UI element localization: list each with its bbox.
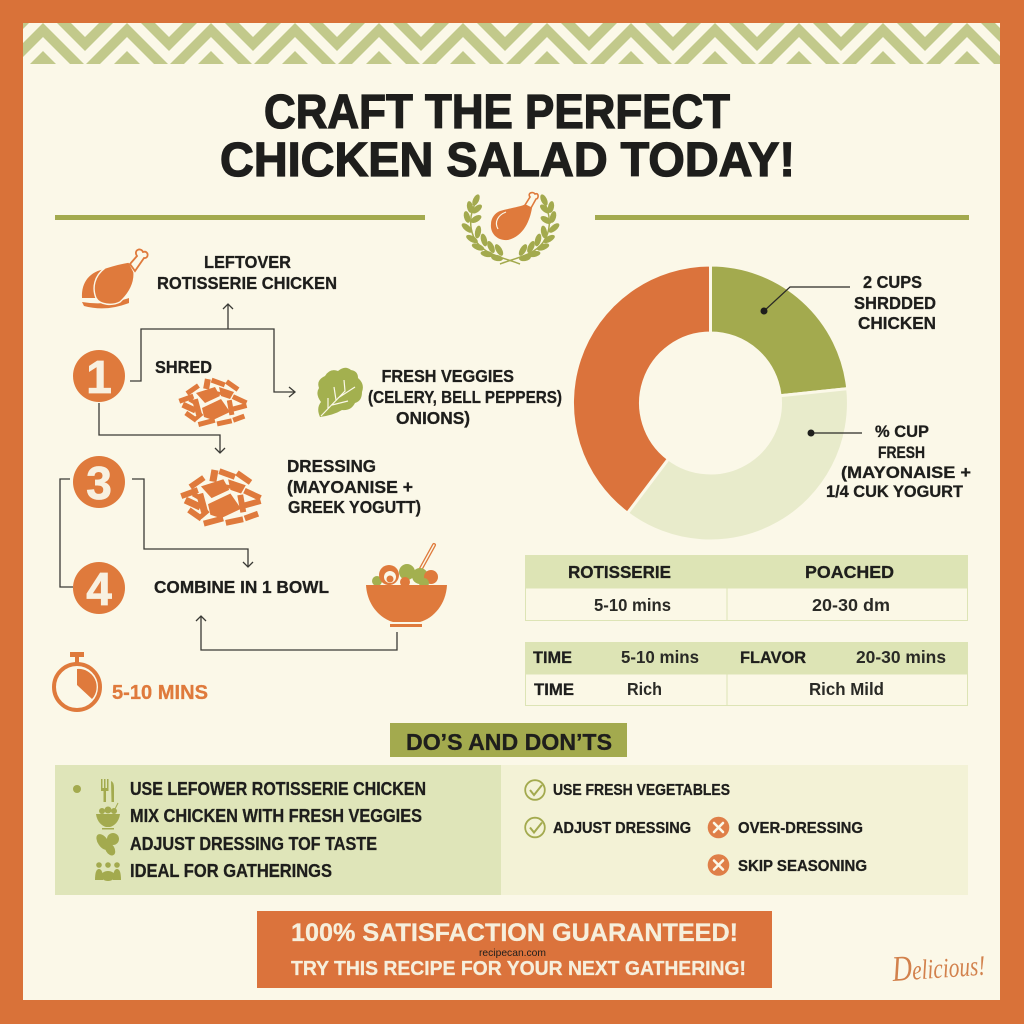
right title rule (595, 215, 969, 220)
step 3 badge (73, 456, 125, 509)
text: fresh veggies (368, 366, 562, 428)
step 1 badge: 1 (86, 351, 112, 403)
tip list: MIX CHICKEN WITH FRESH VEGGIES (130, 806, 422, 826)
text: shred: SHRED (155, 357, 212, 377)
tip list: IDEAL FOR GATHERINGS (130, 861, 332, 881)
table: time and flavor: 20-30 mins (856, 647, 946, 667)
icon: herbs (94, 832, 119, 857)
icon: stopwatch (54, 652, 100, 710)
icon: lettuce leaf (317, 368, 363, 417)
tip list: USE LEFOWER ROTISSERIE CHICKEN (130, 779, 426, 799)
icon: roast chicken (82, 249, 148, 308)
table: time and flavor: TIME (534, 680, 574, 699)
text: fresh veggies: (CELERY, BELL PEPPERS) (368, 387, 562, 407)
callout: cup fresh dressing: % CUP (875, 422, 929, 441)
table: time and flavor: 5-10 mins (621, 647, 699, 667)
title: CHICKEN SALAD TODAY! (220, 134, 795, 187)
text: 5-10 mins: 5-10 MINS (112, 681, 208, 704)
icon: check (525, 818, 545, 837)
icon: salad bowl small (96, 803, 120, 830)
callout: 2 cups shredded chicken: 2 CUPS (863, 272, 922, 292)
segment: shredded chicken (710, 265, 848, 396)
icon: cross (708, 817, 729, 838)
segment: orange (572, 265, 710, 513)
table: time and flavor: FLAVOR (740, 648, 806, 667)
text: dressing: (MAYOANISE + (287, 477, 413, 497)
chevron top band (23, 23, 1000, 64)
text: combine in 1 bowl: COMBINE IN 1 BOWL (154, 577, 329, 597)
connector arrows from step 3 and 4 (60, 479, 397, 650)
signature: delicious: Delicious! (890, 943, 986, 989)
table: time and flavor (525, 642, 968, 706)
icon: chicken leg in laurel wreath (460, 193, 561, 264)
step 3 badge: 3 (86, 457, 112, 509)
title: CRAFT THE PERFECT (264, 86, 730, 139)
table: rotisserie vs poached: ROTISSERIE (568, 562, 671, 582)
connector arrows from step 1 (99, 304, 295, 453)
text: use fresh vegetables: USE FRESH VEGETABLES (553, 782, 730, 799)
guarantee banner (257, 911, 772, 988)
callout: 2 cups shredded chicken: CHICKEN (858, 313, 936, 333)
text: dressing: GREEK YOGUTT) (288, 497, 421, 517)
table: rotisserie vs poached: 5-10 mins (594, 595, 671, 615)
table: time and flavor: TIME (533, 648, 572, 667)
icon: shredded chicken (178, 378, 248, 427)
title (220, 86, 795, 187)
table: rotisserie vs poached: 20-30 dm (812, 595, 890, 615)
icon: people (95, 862, 121, 881)
tip list (130, 779, 426, 881)
step 4 badge: 4 (86, 563, 112, 615)
panel: do and don't checklist (501, 765, 968, 895)
step 1 badge (73, 350, 125, 403)
text: dressing: DRESSING (287, 456, 376, 476)
icon: salad bowl (366, 545, 447, 627)
guarantee banner: 100% SATISFACTION GUARANTEED! (291, 919, 738, 947)
text: over-dressing: OVER-DRESSING (738, 820, 863, 837)
segment: dressing (627, 389, 848, 541)
table: rotisserie vs poached (525, 555, 968, 620)
table: rotisserie vs poached: POACHED (805, 562, 894, 582)
left title rule (55, 215, 425, 220)
text: leftover rotisserie chicken: LEFTOVER (204, 252, 291, 272)
table: time and flavor: Rich (627, 679, 662, 699)
icon: cross (708, 854, 729, 876)
callout: cup fresh dressing: (MAYONAISE + (841, 463, 971, 482)
donut chart (572, 265, 848, 541)
text: fresh veggies: FRESH VEGGIES (382, 366, 514, 386)
icon: shredded chicken dressing (180, 468, 262, 526)
callout: cup fresh dressing (808, 422, 971, 501)
icon: fork and knife (101, 779, 114, 802)
step 4 badge (73, 562, 125, 615)
heading: do's and don'ts: DO’S AND DON’TS (406, 729, 612, 755)
text: adjust dressing: ADJUST DRESSING (553, 820, 691, 837)
callout: cup fresh dressing: FRESH (878, 443, 925, 462)
panel: tips (55, 765, 501, 895)
text: leftover rotisserie chicken (157, 252, 337, 293)
text: fresh veggies: ONIONS) (396, 408, 470, 428)
tip list: ADJUST DRESSING TOF TASTE (130, 834, 377, 854)
table: time and flavor: Rich Mild (809, 679, 884, 699)
heading: do's and don'ts (390, 723, 627, 757)
text: dressing (287, 456, 421, 517)
callout: cup fresh dressing: 1/4 CUK YOGURT (826, 482, 964, 501)
text: skip seasoning: SKIP SEASONING (738, 858, 867, 875)
icon: check (525, 780, 545, 800)
guarantee banner: TRY THIS RECIPE FOR YOUR NEXT GATHERING! (291, 957, 746, 980)
bullet dot (73, 785, 81, 793)
text: leftover rotisserie chicken: ROTISSERIE CHICKEN (157, 273, 337, 293)
callout: 2 cups shredded chicken: SHRDDED (854, 293, 936, 313)
guarantee banner: recipecan.com (479, 947, 546, 959)
callout: 2 cups shredded chicken (760, 272, 936, 333)
